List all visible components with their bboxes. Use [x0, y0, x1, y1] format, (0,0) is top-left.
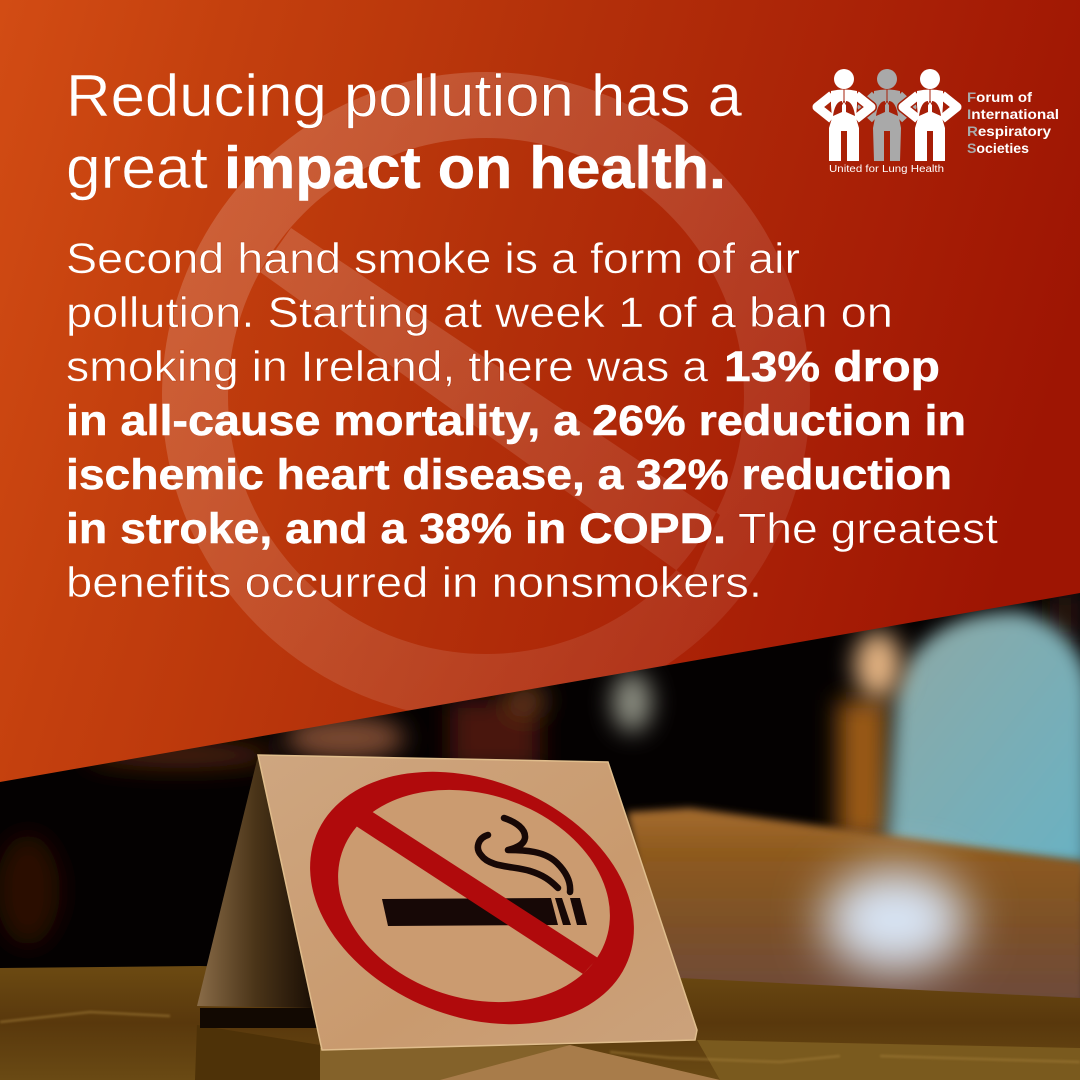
blurred counter: [627, 808, 1080, 1005]
title: impact on health.: [224, 135, 726, 201]
body text: in all-cause mortality, a 26% reduction in: [66, 397, 966, 445]
body text: 13% drop: [724, 343, 940, 391]
logo tagline: United for Lung Health: [829, 163, 944, 175]
red banner: [0, 0, 1080, 782]
white right figure: [903, 69, 957, 161]
logo: Forum of International Respiratory Societies: [817, 69, 1059, 175]
watermark prohibition symbol: [162, 72, 810, 720]
cigarette: [382, 898, 587, 926]
no smoking table sign: [197, 726, 697, 1070]
body text: benefits occurred in nonsmokers.: [66, 559, 762, 607]
table tile seams: [0, 1012, 1080, 1062]
body text: ischemic heart disease, a 32% reduction: [66, 451, 952, 499]
sign face: [258, 755, 697, 1050]
prohibition ring: [272, 726, 672, 1070]
body text: in stroke, and a 38% in COPD.: [66, 505, 726, 553]
sign back fold: [197, 756, 314, 1008]
table top: [0, 966, 1080, 1080]
body text: smoking in Ireland, there was a: [66, 343, 708, 391]
white left figure: [817, 69, 871, 161]
title: great: [66, 135, 208, 201]
title: [66, 63, 742, 201]
title: Reducing pollution has a: [66, 63, 742, 129]
body text: [66, 235, 998, 607]
logo wordmark: Societies: [967, 141, 1029, 156]
prohibition slash: [356, 811, 598, 974]
logo wordmark: Respiratory: [967, 124, 1052, 139]
smoke: [478, 818, 570, 892]
logo wordmark: [967, 90, 1059, 156]
body text: Second hand smoke is a form of air: [66, 235, 800, 283]
logo wordmark: Forum of: [967, 90, 1033, 105]
blurred teal figure: [885, 612, 1080, 870]
logo wordmark: International: [967, 107, 1059, 122]
grey centre figure: [862, 69, 912, 161]
body text: pollution. Starting at week 1 of a ban on: [66, 289, 893, 337]
blurred warm glow behind the sign: [0, 590, 1080, 945]
logo figures: [817, 69, 957, 161]
body text: The greatest: [738, 505, 998, 553]
photo background: blurred bar interior: [0, 580, 1080, 1080]
